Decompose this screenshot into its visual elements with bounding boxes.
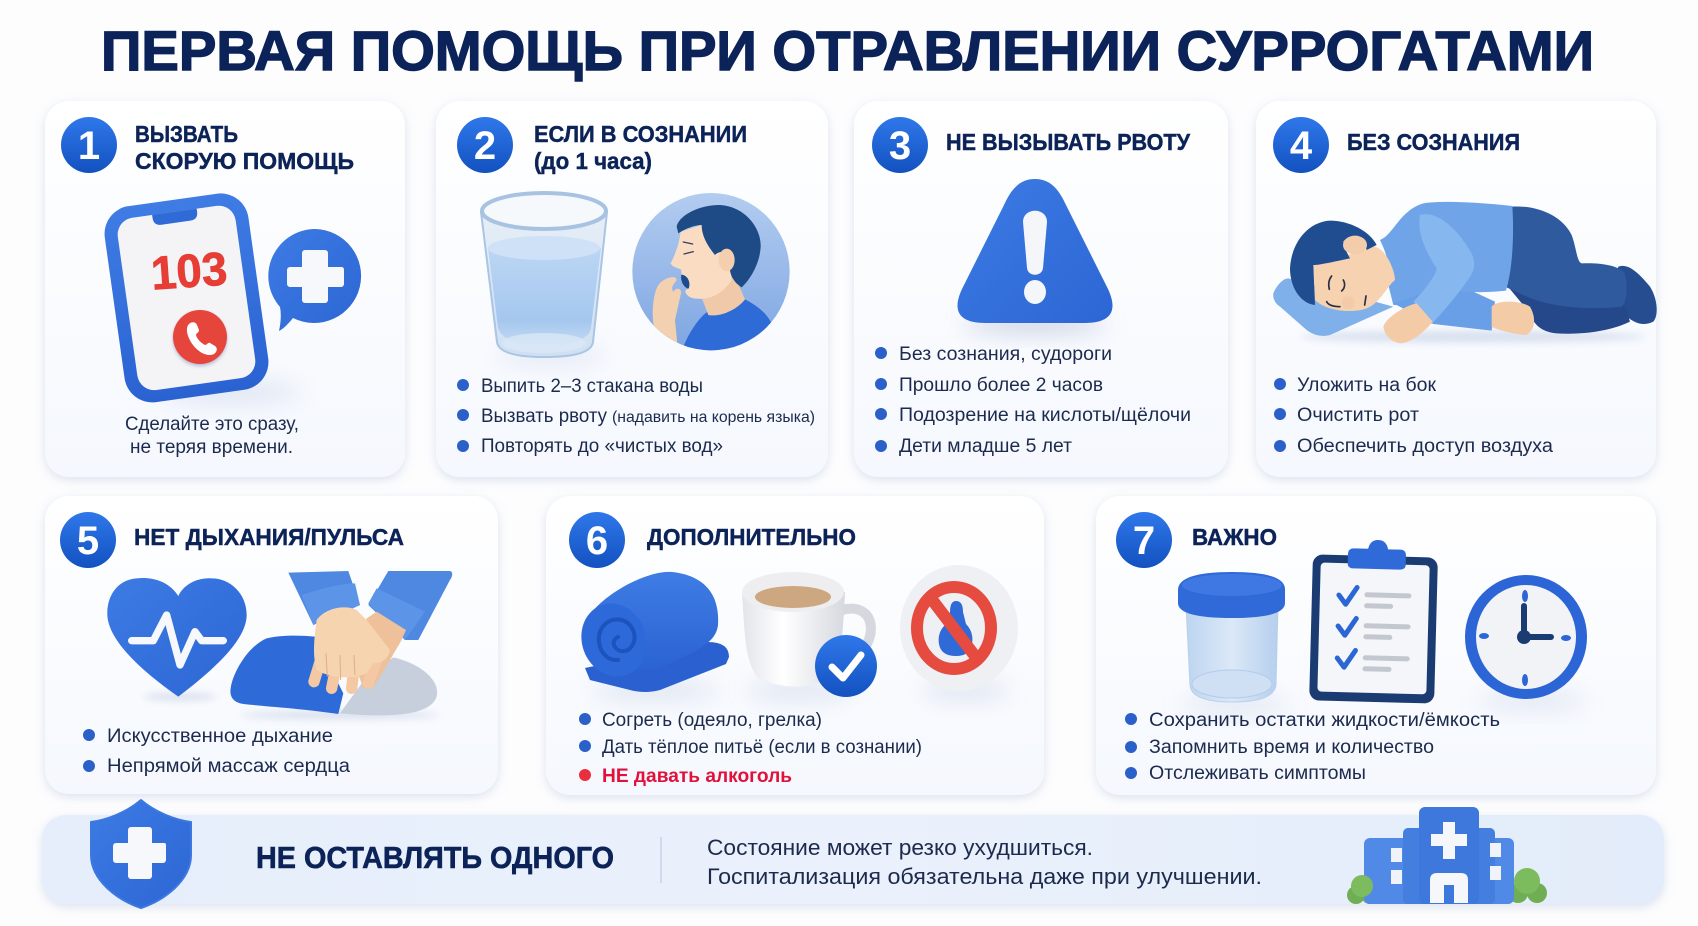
- badge 7: [1116, 512, 1172, 568]
- banner text: Госпитализация обязательна даже при улучшении.: [707, 864, 1262, 889]
- icon: chest compressions: [230, 571, 452, 718]
- panel: 4 unconscious: [1256, 101, 1657, 477]
- badge 7: 7: [1133, 519, 1155, 563]
- icon: warm cup with check: [742, 572, 877, 697]
- banner text: Состояние может резко ухудшиться.: [707, 835, 1093, 860]
- bullets 7: Отслеживать симптомы: [1149, 763, 1366, 784]
- badge 3: 3: [889, 124, 911, 168]
- panel: 1 call ambulance: [45, 101, 405, 477]
- bullets 4: Обеспечить доступ воздуха: [1297, 436, 1553, 457]
- bullets 5: Искусственное дыхание: [107, 726, 333, 747]
- heading 2: ЕСЛИ В СОЗНАНИИ: [534, 121, 747, 147]
- icon: person inducing vomiting: [632, 193, 790, 353]
- bullets 3: Подозрение на кислоты/щёлочи: [899, 405, 1191, 426]
- badge 3: [872, 117, 928, 173]
- icon: heart with pulse: [107, 578, 247, 700]
- bullets 7: Сохранить остатки жидкости/ёмкость: [1149, 710, 1500, 731]
- bullets 7: Запомнить время и количество: [1149, 737, 1434, 758]
- bullets 3: [875, 344, 1191, 457]
- panel: 2 conscious: [436, 101, 828, 477]
- icon: clock: [1465, 575, 1587, 706]
- bullets 3: Без сознания, судороги: [899, 344, 1112, 365]
- icon: glass of water: [481, 193, 607, 363]
- panel: 3 do not induce vomiting: [854, 101, 1228, 477]
- bullets 6: [579, 710, 922, 787]
- badge 6: 6: [586, 519, 608, 563]
- caption: Сделайте это сразу,: [125, 414, 299, 435]
- heading 5: НЕТ ДЫХАНИЯ/ПУЛЬСА: [134, 524, 404, 550]
- title: ПЕРВАЯ ПОМОЩЬ ПРИ ОТРАВЛЕНИИ СУРРОГАТАМИ: [101, 19, 1594, 82]
- icon: rolled blanket: [571, 572, 729, 697]
- heading 3: НЕ ВЫЗЫВАТЬ РВОТУ: [946, 129, 1191, 155]
- bullets 2: Повторять до «чистых вод»: [481, 436, 723, 457]
- caption: не теряя времени.: [130, 437, 293, 458]
- panel: 6 additional: [546, 496, 1044, 795]
- badge 4: 4: [1290, 124, 1313, 168]
- panel: 7 important: [1096, 496, 1656, 795]
- icon: medical speech bubble: [268, 229, 361, 331]
- badge 1: [61, 117, 117, 173]
- heading 2: (до 1 часа): [534, 148, 652, 174]
- icon: no alcohol sign: [900, 565, 1018, 697]
- icon: warning triangle: [957, 179, 1113, 330]
- bullets 6: Согреть (одеяло, грелка): [602, 710, 822, 731]
- icon: shield: [91, 800, 191, 908]
- icon: sample jar: [1178, 572, 1290, 710]
- icon: clipboard checklist: [1309, 538, 1438, 704]
- bullets 6: НЕ давать алкоголь: [602, 766, 792, 787]
- bullets 2: (надавить на корень языка): [612, 409, 815, 426]
- badge 4: [1273, 117, 1329, 173]
- heading 6: ДОПОЛНИТЕЛЬНО: [647, 524, 856, 550]
- bullets 7: [1125, 710, 1500, 784]
- heading 1: ВЫЗВАТЬ: [135, 121, 238, 147]
- number 103: 103: [149, 241, 229, 300]
- badge 5: 5: [77, 519, 99, 563]
- banner heading: НЕ ОСТАВЛЯТЬ ОДНОГО: [256, 840, 614, 875]
- panel: 5 no breathing or pulse: [45, 496, 498, 794]
- bullets 3: Дети младше 5 лет: [899, 436, 1072, 457]
- bullets 4: Очистить рот: [1297, 405, 1419, 426]
- icon: phone 103: [101, 190, 300, 406]
- bullets 2: [457, 376, 815, 457]
- icon: hospital: [1347, 807, 1547, 904]
- bullets 5: [83, 726, 350, 777]
- heading 4: БЕЗ СОЗНАНИЯ: [1347, 129, 1520, 155]
- bullets 5: Непрямой массаж сердца: [107, 756, 350, 777]
- heading 7: ВАЖНО: [1192, 524, 1277, 550]
- badge 2: 2: [474, 124, 496, 168]
- bullets 2: Вызвать рвоту: [481, 406, 607, 427]
- bullets 2: Выпить 2–3 стакана воды: [481, 376, 703, 397]
- badge 2: [457, 117, 513, 173]
- badge 5: [60, 512, 116, 568]
- banner: do not leave alone: [42, 800, 1664, 908]
- bullets 3: Прошло более 2 часов: [899, 375, 1103, 396]
- badge 1: 1: [78, 124, 100, 168]
- badge 6: [569, 512, 625, 568]
- heading 1: СКОРУЮ ПОМОЩЬ: [135, 148, 354, 174]
- icon: person in recovery position: [1273, 202, 1657, 343]
- bullets 6: Дать тёплое питьё (если в сознании): [602, 737, 922, 758]
- bullets 4: [1274, 375, 1553, 457]
- bullets 4: Уложить на бок: [1297, 375, 1437, 396]
